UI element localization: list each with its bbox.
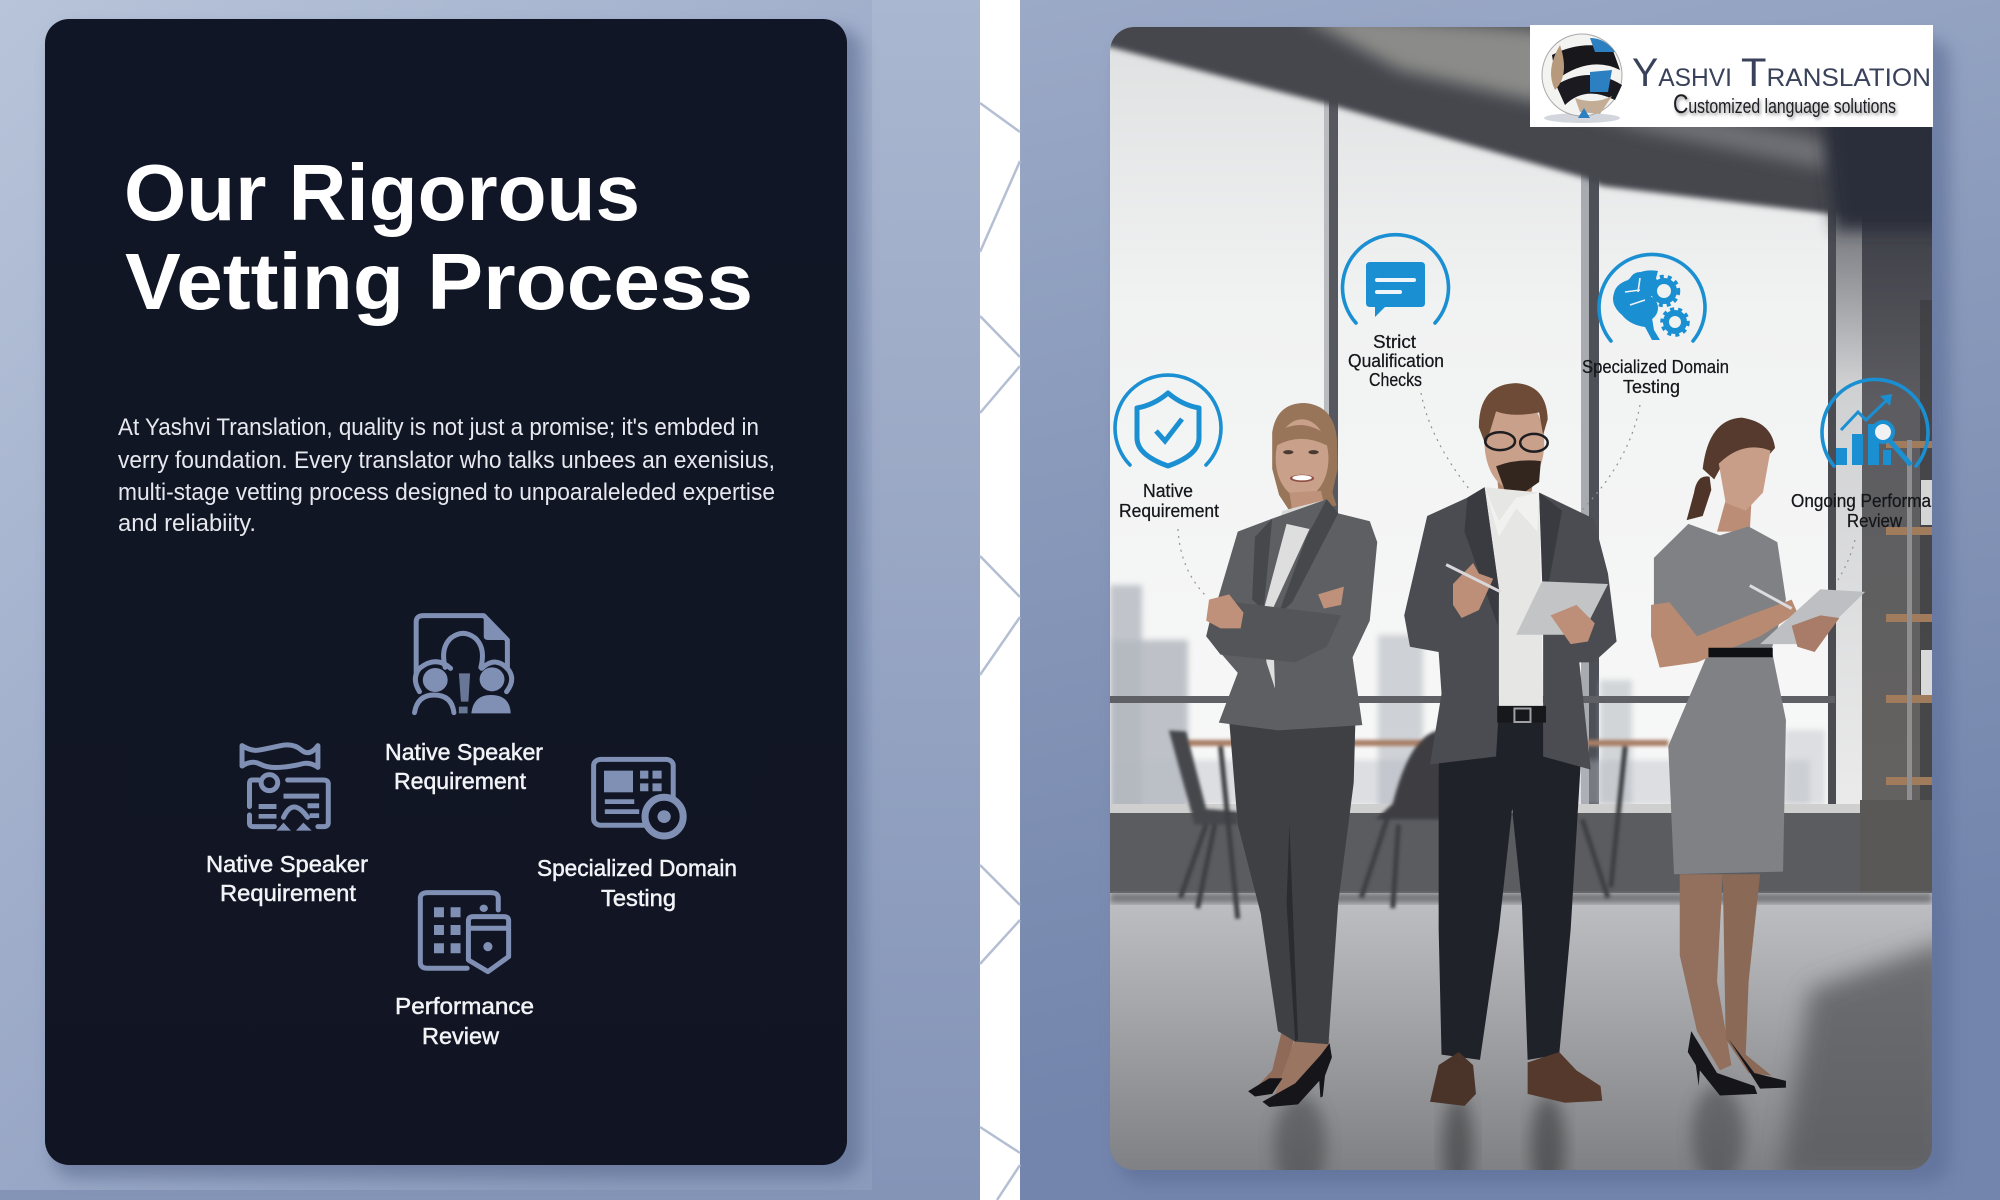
label: performance review — [395, 993, 534, 1049]
logo: TRANSLATION — [1741, 51, 1931, 95]
heading: Vetting Process — [125, 237, 753, 326]
panel: office photo shadow — [1118, 38, 1950, 1183]
heading — [124, 148, 753, 326]
callout: specialized domain testing: Specialized Domain — [1582, 356, 1729, 377]
callout: ongoing performance review: Ongoing Performa — [1791, 490, 1932, 511]
intro paragraph — [118, 414, 775, 537]
callout: strict qualification checks: Strict — [1373, 331, 1416, 352]
label: native speaker requirement top: Requirement — [394, 768, 527, 794]
callout: strict qualification checks — [1343, 235, 1448, 390]
callout: native requirement — [1115, 375, 1221, 521]
icon: brain and gears — [1613, 270, 1688, 340]
label: performance review: Performance — [395, 993, 534, 1019]
sill and lower wall — [1110, 804, 1860, 813]
floor — [1110, 893, 1950, 1195]
logo: Customized language solutions — [1673, 89, 1896, 119]
intro paragraph: multi-stage vetting process designed to unpoaraleleded expertise — [118, 479, 775, 506]
icon: chart with magnifier — [1836, 394, 1911, 465]
heading: Our Rigorous — [124, 148, 640, 237]
window frame bar — [1110, 696, 1835, 703]
person: man with tablet — [1404, 383, 1617, 1106]
callout: native requirement: Native — [1143, 480, 1193, 501]
callout: strict qualification checks: Qualification — [1348, 350, 1444, 371]
person: woman with crossed arms — [1206, 403, 1377, 1107]
right wall — [1862, 218, 1932, 800]
callout: ongoing performance review: Review — [1847, 510, 1903, 531]
window and ceiling scene — [1090, 0, 1950, 910]
label: native speaker requirement top — [385, 739, 543, 794]
icon: globe — [1542, 34, 1622, 123]
callout: strict qualification checks: Checks — [1369, 369, 1422, 390]
callout: ongoing performance review — [1791, 379, 1932, 531]
shelves — [1886, 441, 1936, 785]
callout connector lines — [1178, 393, 1855, 597]
person: woman in grey dress — [1651, 418, 1865, 1095]
callout: specialized domain testing: Testing — [1623, 376, 1680, 397]
label: native speaker requirement left — [206, 851, 368, 906]
logo: YASHVI — [1632, 51, 1732, 95]
callout: native requirement: Requirement — [1119, 500, 1219, 521]
mullions — [1324, 101, 1329, 415]
intro paragraph: verry foundation. Every translator who talks unbees an exenisius, — [118, 447, 775, 474]
icon: domain testing — [594, 759, 686, 839]
icon: shield — [1137, 393, 1199, 466]
label: specialized domain testing — [537, 855, 737, 911]
intro paragraph: and reliabiity. — [118, 510, 256, 537]
callout: specialized domain testing — [1582, 254, 1729, 397]
panel: vetting process — [45, 19, 862, 1178]
icon: performance review — [420, 893, 509, 972]
panel: office photo — [1090, 0, 1950, 1195]
label: native speaker requirement left: Native Speaker — [206, 851, 368, 877]
icon: certificate — [242, 745, 328, 831]
label: native speaker requirement top: Native Speaker — [385, 739, 543, 765]
ceiling — [1110, 27, 1844, 218]
table and chairs — [1169, 730, 1668, 919]
icon: chat bubble — [1366, 262, 1425, 317]
label: native speaker requirement left: Requirement — [220, 880, 357, 906]
white divider strip with chevrons — [980, 0, 1020, 1200]
logo — [1530, 25, 1933, 127]
label: performance review: Review — [422, 1023, 499, 1049]
intro paragraph: At Yashvi Translation, quality is not just a promise; it's embded in — [118, 414, 759, 441]
label: specialized domain testing: Testing — [601, 885, 676, 911]
city — [1110, 585, 1825, 810]
label: specialized domain testing: Specialized Domain — [537, 855, 737, 881]
icon: people document — [415, 616, 512, 713]
